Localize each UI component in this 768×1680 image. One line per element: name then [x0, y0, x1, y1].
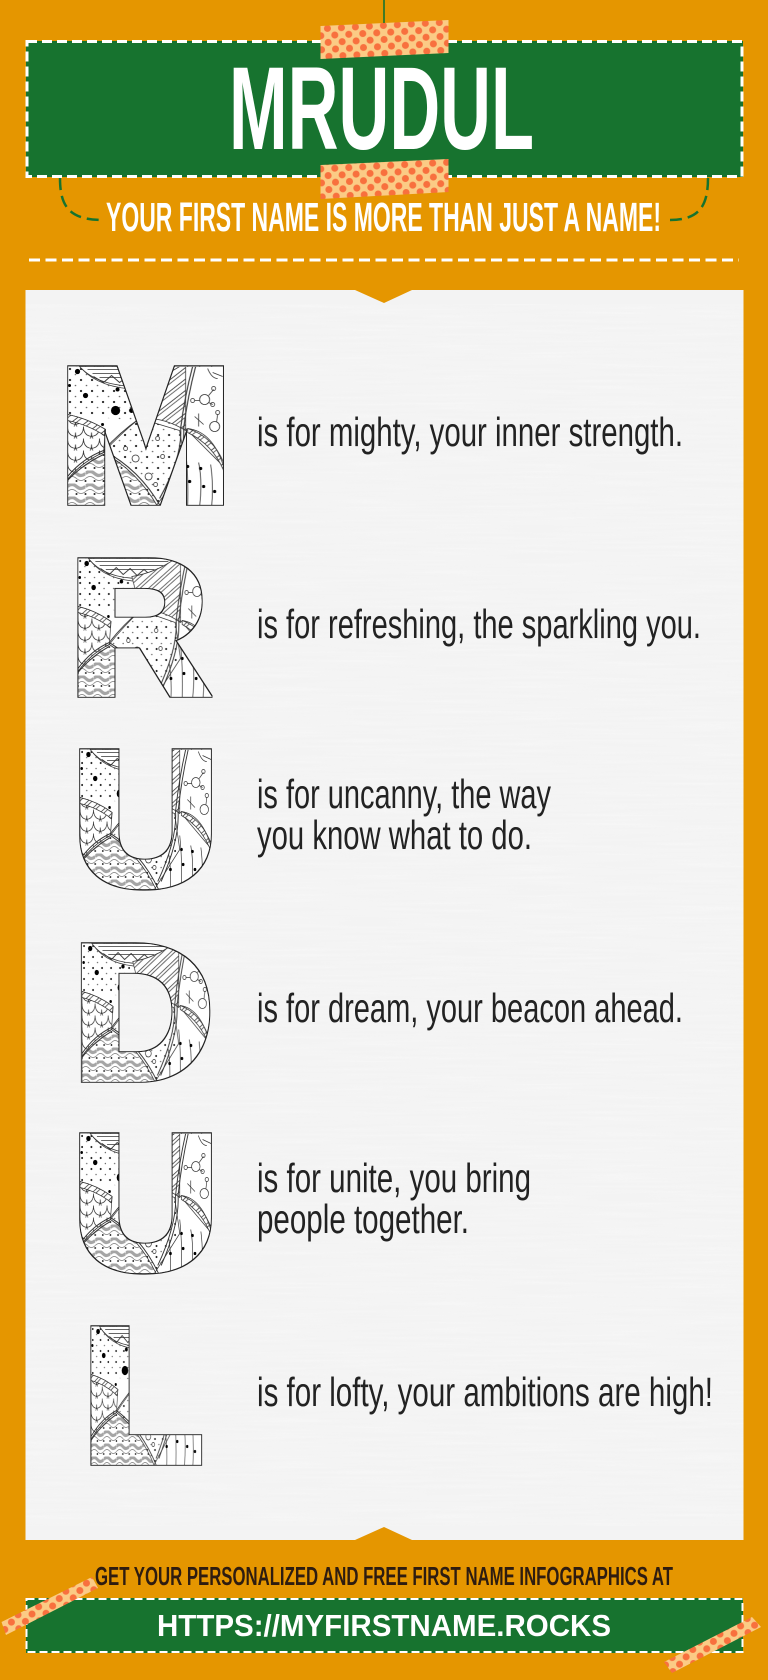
dashed connector right [670, 178, 708, 220]
letter U: U [73, 714, 219, 924]
letter M: M [59, 330, 232, 541]
letter R: R [70, 522, 208, 733]
letter D: D [73, 907, 213, 1118]
letter row U second [73, 1098, 531, 1308]
title banner [26, 41, 743, 177]
title: MRUDUL [229, 43, 534, 175]
text U: is for uncanny, the way [257, 771, 551, 817]
panel: letters and meanings [26, 290, 744, 1540]
letter row L [83, 1289, 713, 1501]
text U second [257, 1155, 531, 1242]
letter row M [59, 330, 683, 541]
letter row R [70, 522, 701, 733]
text U second: people together. [257, 1196, 469, 1242]
hanging thread [383, 0, 385, 26]
tape: footer left [2, 1577, 98, 1635]
text U [257, 771, 551, 858]
letter row U [73, 714, 551, 924]
tape: bottom [320, 159, 448, 199]
letter row D [73, 907, 683, 1118]
letter U second: U [73, 1098, 219, 1308]
tape: top [320, 20, 448, 59]
footer url: HTTPS://MYFIRSTNAME.ROCKS [157, 1609, 611, 1643]
letter L: L [83, 1289, 203, 1501]
dashed connector left [60, 178, 103, 220]
tape: footer right [664, 1617, 761, 1673]
footer banner [26, 1598, 743, 1653]
text U: you know what to do. [257, 812, 532, 858]
text U second: is for unite, you bring [257, 1155, 531, 1201]
